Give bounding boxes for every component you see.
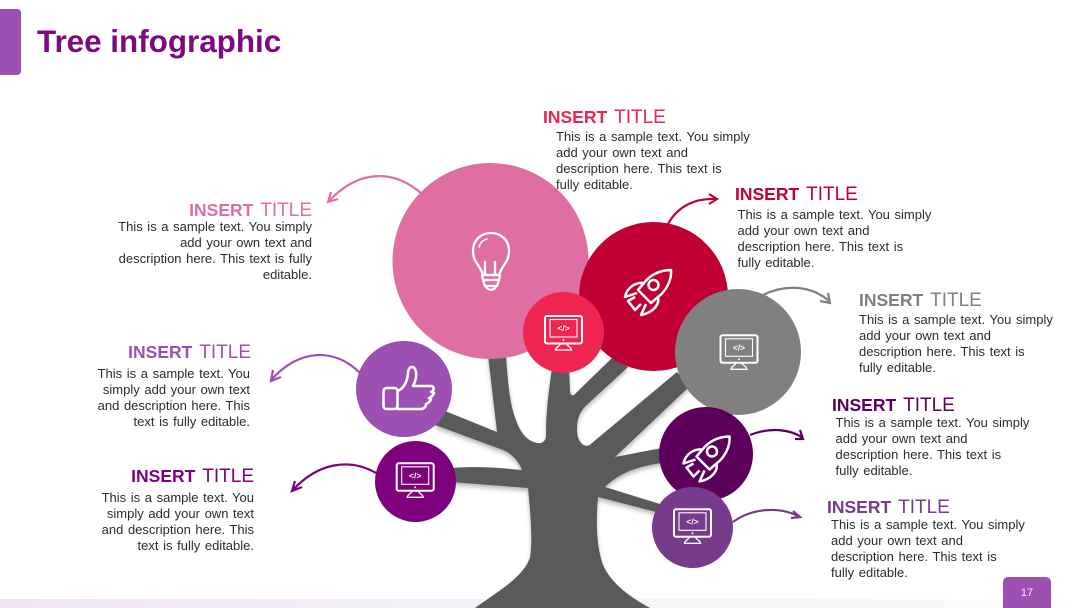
text: pink: This is a sample text. You simply — [118, 219, 312, 234]
heading: crimson: INSERT TITLE — [735, 184, 858, 205]
circle: red with monitor — [523, 292, 604, 373]
text: pink — [118, 219, 312, 282]
text: pink: editable. — [263, 267, 312, 282]
text: violet — [831, 517, 1025, 580]
text: gray: add your own text and — [859, 328, 991, 343]
heading: pink: INSERT TITLE — [189, 200, 312, 221]
text: violet: fully editable. — [831, 565, 908, 580]
icon: light bulb — [473, 233, 509, 290]
text: dark purple: This is a sample text. You — [102, 490, 254, 505]
tree trunk and branches — [435, 355, 690, 608]
title accent tab — [0, 9, 21, 75]
heading: violet: INSERT TITLE — [827, 497, 950, 518]
icon: monitor: </> — [557, 323, 570, 333]
text: top red: add your own text and — [556, 145, 688, 160]
circle: plum with rocket — [659, 407, 753, 501]
text: plum: add your own text and — [836, 431, 967, 446]
text: purple — [98, 366, 250, 429]
text: pink: add your own text and — [180, 235, 312, 250]
text: gray — [859, 312, 1053, 375]
icon: monitor: </> — [686, 516, 699, 526]
heading: dark purple: INSERT TITLE — [131, 466, 254, 487]
text: crimson: description here. This text is — [738, 239, 903, 254]
circle: violet with monitor — [652, 487, 733, 568]
text: crimson — [738, 207, 932, 270]
text: purple: simply add your own text — [103, 382, 250, 397]
icon: rocket — [684, 436, 730, 482]
footer gradient band — [0, 599, 1080, 608]
arrow: purple — [271, 355, 360, 381]
icon: thumbs up — [384, 367, 434, 409]
arrow: crimson — [668, 194, 717, 224]
text: violet: add your own text and — [831, 533, 963, 548]
text: gray: fully editable. — [859, 360, 936, 375]
text: top red: fully editable. — [556, 177, 633, 192]
text: crimson: fully editable. — [738, 255, 814, 270]
text: plum: This is a sample text. You simply — [836, 415, 1029, 430]
arrow: violet — [733, 510, 800, 522]
text: plum: description here. This text is — [836, 447, 1001, 462]
text: plum: fully editable. — [836, 463, 912, 478]
arrow: pink — [328, 176, 422, 202]
page number badge: 17 — [1021, 587, 1033, 599]
text: plum — [836, 415, 1030, 478]
text: purple: text is fully editable. — [134, 414, 250, 429]
heading: top red: INSERT TITLE — [543, 107, 666, 128]
arrow: gray — [763, 288, 830, 303]
icon: rocket — [625, 270, 671, 315]
text: purple: and description here. This — [98, 398, 250, 413]
text: dark purple: simply add your own text — [107, 506, 254, 521]
text: top red — [556, 129, 750, 192]
text: dark purple: text is fully editable. — [138, 538, 254, 553]
heading: plum: INSERT TITLE — [832, 395, 955, 416]
text: dark purple — [102, 490, 254, 553]
text: violet: This is a sample text. You simply — [831, 517, 1025, 532]
page number badge — [1003, 577, 1051, 608]
circle: purple with thumb — [356, 341, 452, 437]
text: violet: description here. This text is — [831, 549, 997, 564]
arrow: plum — [750, 430, 803, 439]
text: top red: This is a sample text. You simply — [556, 129, 750, 144]
text: gray: This is a sample text. You simply — [859, 312, 1053, 327]
text: purple: This is a sample text. You — [98, 366, 250, 381]
text: dark purple: and description here. This — [102, 522, 254, 537]
heading: gray: INSERT TITLE — [859, 290, 982, 311]
text: crimson: add your own text and — [738, 223, 869, 238]
circle: dark purple with monitor — [375, 441, 456, 522]
arrow: dark purple — [292, 464, 376, 491]
text: top red: description here. This text is — [556, 161, 722, 176]
circle: gray with monitor — [675, 289, 801, 415]
circle: pink with bulb — [392, 163, 588, 359]
icon: monitor: </> — [733, 342, 745, 352]
text: crimson: This is a sample text. You simply — [738, 207, 931, 222]
heading: purple: INSERT TITLE — [128, 342, 251, 363]
text: gray: description here. This text is — [859, 344, 1025, 359]
text: pink: description here. This text is fully — [119, 251, 312, 266]
icon: monitor: </> — [409, 470, 421, 480]
title: Tree infographic — [37, 24, 281, 59]
circle: crimson with rocket — [579, 222, 728, 371]
